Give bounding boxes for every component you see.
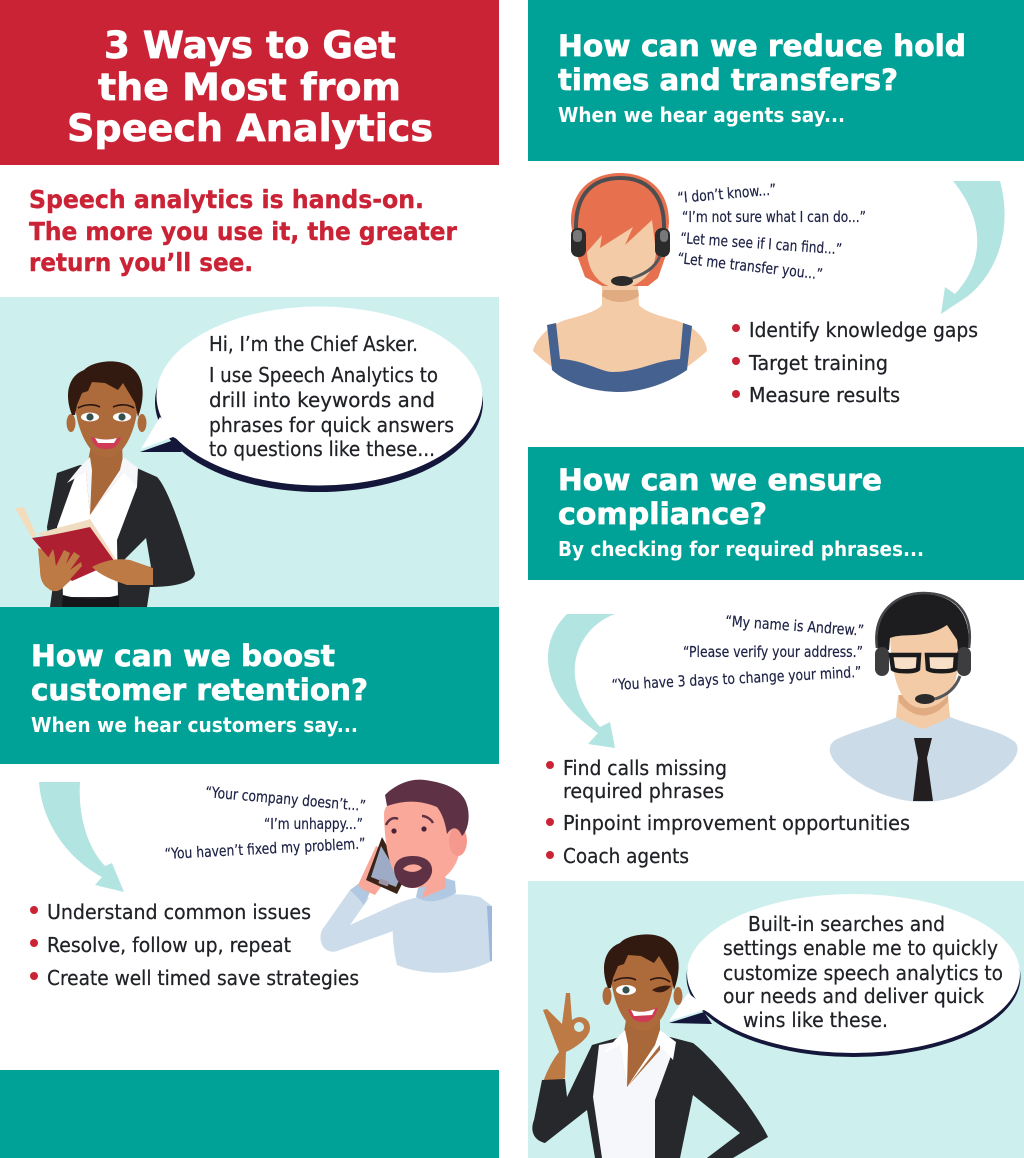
heading: hold times <box>558 29 966 97</box>
heading: hold times: How can we reduce hold <box>558 29 966 63</box>
speech bubble: chief asker <box>140 306 483 492</box>
customer quotes: “You haven’t fixed my problem.” <box>164 834 366 863</box>
speech text: quick wins: wins like these. <box>743 1008 888 1032</box>
speech bubble: quick wins <box>669 894 1020 1057</box>
customer quotes <box>164 783 367 863</box>
illustration: woman winking with OK sign <box>532 934 768 1158</box>
illustration: male agent with headset <box>830 593 1018 802</box>
speech text: chief asker: phrases for quick answers <box>209 413 454 437</box>
heading: compliance: compliance? <box>558 497 767 531</box>
panel: chief asker introduction <box>0 297 499 607</box>
panel: hold times heading <box>528 0 1024 161</box>
speech text: quick wins: settings enable me to quickly <box>723 936 998 960</box>
title <box>67 24 433 150</box>
customer quotes: “I’m unhappy...” <box>264 815 363 833</box>
subheading: customers say: When we hear customers say... <box>31 713 358 737</box>
speech text: chief asker: Hi, I’m the Chief Asker. <box>209 332 418 356</box>
illustration: woman holding book <box>15 361 195 607</box>
subheading: required phrases: By checking for required phrases... <box>558 537 924 561</box>
panel: customer retention heading <box>0 607 499 764</box>
heading: customer retention <box>31 639 368 707</box>
action list: customer retention: Understand common issues <box>47 900 311 924</box>
title: the Most from <box>98 66 401 109</box>
action list: customer retention: Create well timed save strategies <box>47 966 359 990</box>
panel: compliance content <box>546 593 1018 868</box>
heading: compliance: How can we ensure <box>558 463 882 497</box>
panel: compliance heading <box>528 447 1024 580</box>
illustration: female agent with headset <box>533 173 707 392</box>
action list: compliance <box>546 756 910 868</box>
agent quotes: “Let me see if I can find...” <box>680 229 843 258</box>
panel: hold times content <box>533 173 1005 407</box>
arrow: compliance quotes to actions <box>548 614 615 748</box>
action list: compliance: Pinpoint improvement opportunities <box>563 811 910 835</box>
speech text: chief asker: I use Speech Analytics to <box>209 363 438 387</box>
speech text: chief asker: to questions like these... <box>209 437 435 461</box>
action list: customer retention <box>30 900 359 990</box>
agent quotes <box>677 180 866 284</box>
intro text <box>29 185 458 277</box>
heading: compliance <box>558 463 882 531</box>
arrow: agent quotes to actions <box>941 181 1005 314</box>
heading: customer retention: customer retention? <box>31 673 368 707</box>
compliance quotes: “You have 3 days to change your mind.” <box>611 663 862 694</box>
intro text: return you’ll see. <box>29 248 253 277</box>
action list: compliance: Find calls missing <box>563 756 727 780</box>
compliance quotes: “My name is Andrew.” <box>725 612 865 640</box>
speech text: quick wins <box>723 912 1003 1032</box>
panel: left footer band <box>0 1070 499 1158</box>
arrow: quotes to actions <box>39 782 124 892</box>
title: 3 Ways to Get <box>104 24 396 67</box>
action list: hold times: Target training <box>748 351 888 375</box>
illustration: man on phone <box>320 780 492 973</box>
heading: hold times: times and transfers? <box>558 63 898 97</box>
compliance quotes: “Please verify your address.” <box>683 643 863 661</box>
speech text: quick wins: customize speech analytics to <box>723 961 1003 985</box>
panel: customer retention content <box>30 780 492 990</box>
title: Speech Analytics <box>67 107 433 150</box>
panel: title banner <box>0 0 499 165</box>
speech text: quick wins: our needs and deliver quick <box>723 984 984 1008</box>
woman head winking <box>602 934 682 1031</box>
heading: customer retention: How can we boost <box>31 639 335 673</box>
speech text: quick wins: Built-in searches and <box>748 912 945 936</box>
intro text: Speech analytics is hands-on. <box>29 185 424 214</box>
action list: hold times: Measure results <box>749 383 900 407</box>
subheading: agents say: When we hear agents say... <box>558 103 845 127</box>
speech text: chief asker: drill into keywords and <box>209 388 435 412</box>
action list: customer retention: Resolve, follow up, repeat <box>47 933 291 957</box>
action list: hold times <box>732 318 978 407</box>
intro text: The more you use it, the greater <box>29 217 458 246</box>
speech text: chief asker <box>209 332 454 461</box>
customer quotes: “Your company doesn’t...” <box>205 783 367 815</box>
agent quotes: “Let me transfer you...” <box>677 249 824 284</box>
compliance quotes <box>611 612 865 694</box>
action list: hold times: Identify knowledge gaps <box>749 318 978 342</box>
agent quotes: “I don’t know...” <box>677 180 777 207</box>
panel: quick wins closing <box>528 881 1024 1158</box>
action list: compliance: required phrases <box>563 779 724 803</box>
woman head <box>66 361 146 458</box>
agent quotes: “I’m not sure what I can do...” <box>682 208 866 226</box>
action list: compliance: Coach agents <box>563 844 689 868</box>
